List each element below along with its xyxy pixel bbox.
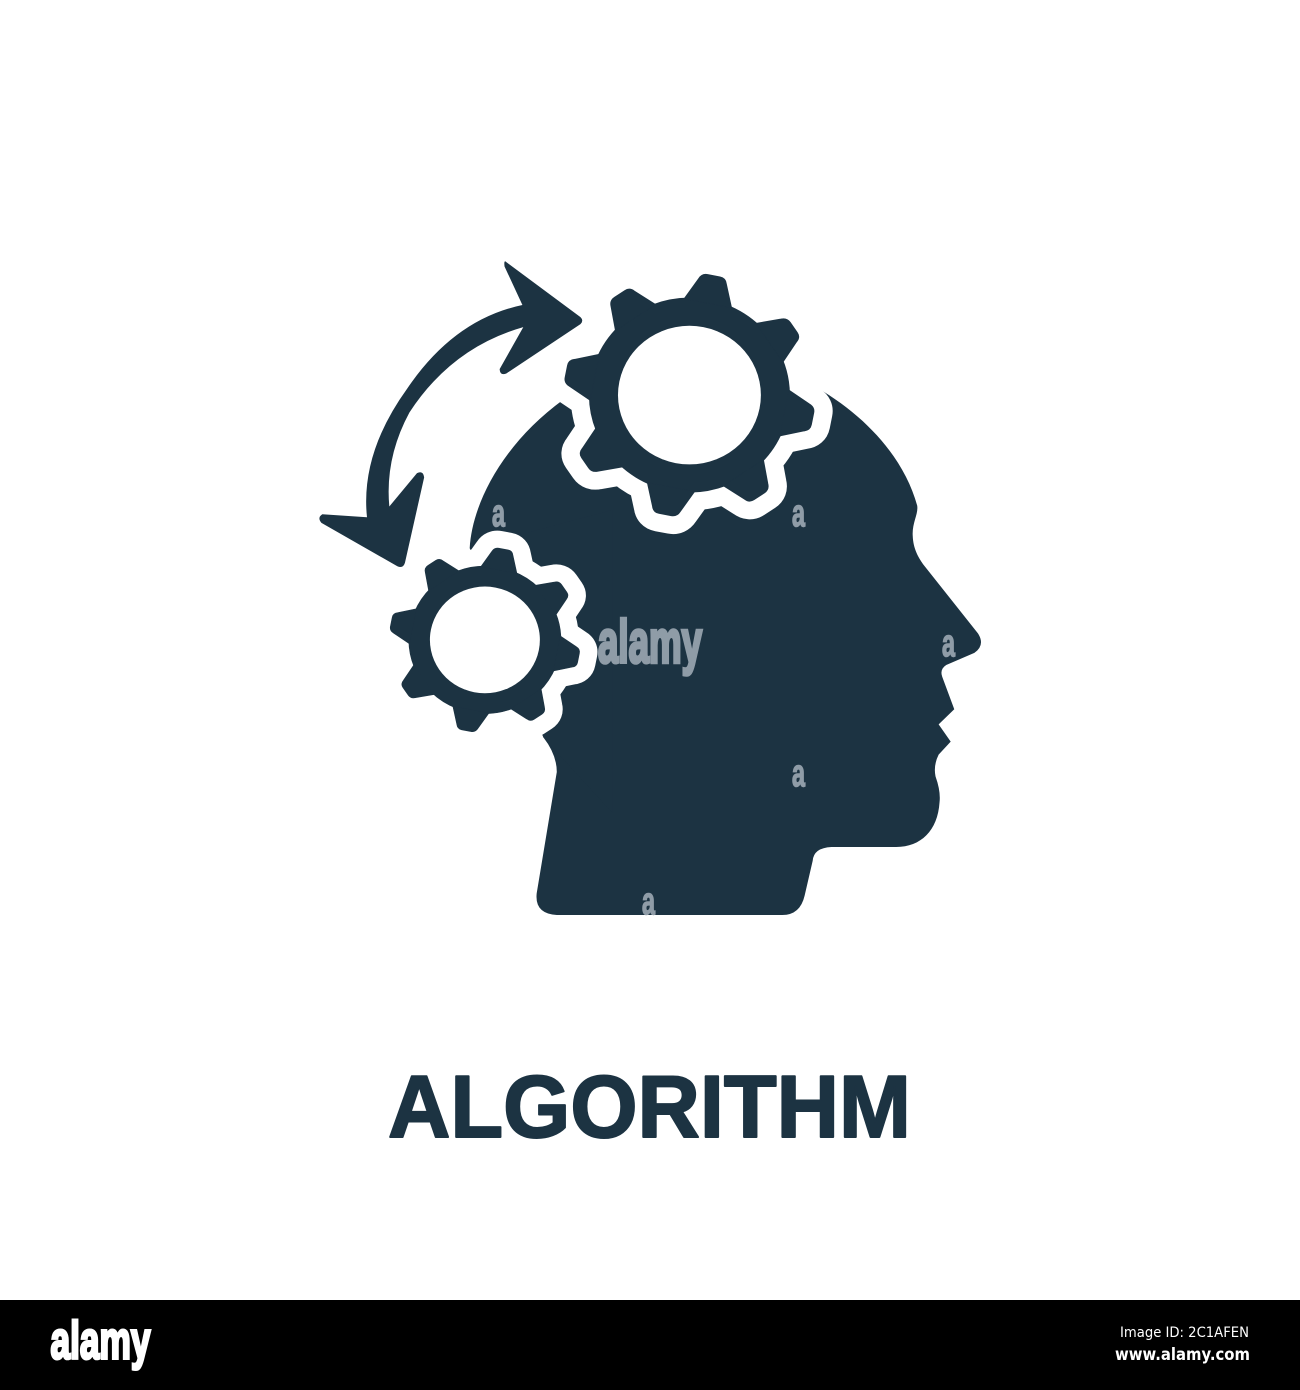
- icon: small gear halo: [388, 546, 582, 734]
- watermark: letter a: a: [492, 493, 506, 535]
- icon: head silhouette: [470, 381, 981, 915]
- icon: circular arrow: [319, 261, 582, 567]
- image id: Image ID: 2C1AFEN: [1120, 1325, 1249, 1341]
- footer logo: alamy: [50, 1312, 151, 1370]
- icon: large gear halo: [562, 271, 817, 519]
- title: ALGORITHM: [388, 1057, 911, 1156]
- watermark: letter a: a: [942, 623, 956, 665]
- icon: small gear: [388, 546, 582, 734]
- watermark: letter a: a: [792, 753, 806, 795]
- website: www.alamy.com: [1115, 1345, 1250, 1365]
- watermark: letter a: a: [642, 881, 656, 923]
- watermark: alamy center: alamy: [598, 608, 702, 676]
- icon: head lower-left fill: [470, 510, 613, 813]
- footer bar: [0, 1300, 1300, 1390]
- icon: head with gears and cycle arrow: [319, 261, 981, 915]
- watermark: letter a: a: [792, 493, 806, 535]
- icon: large gear: [562, 271, 817, 519]
